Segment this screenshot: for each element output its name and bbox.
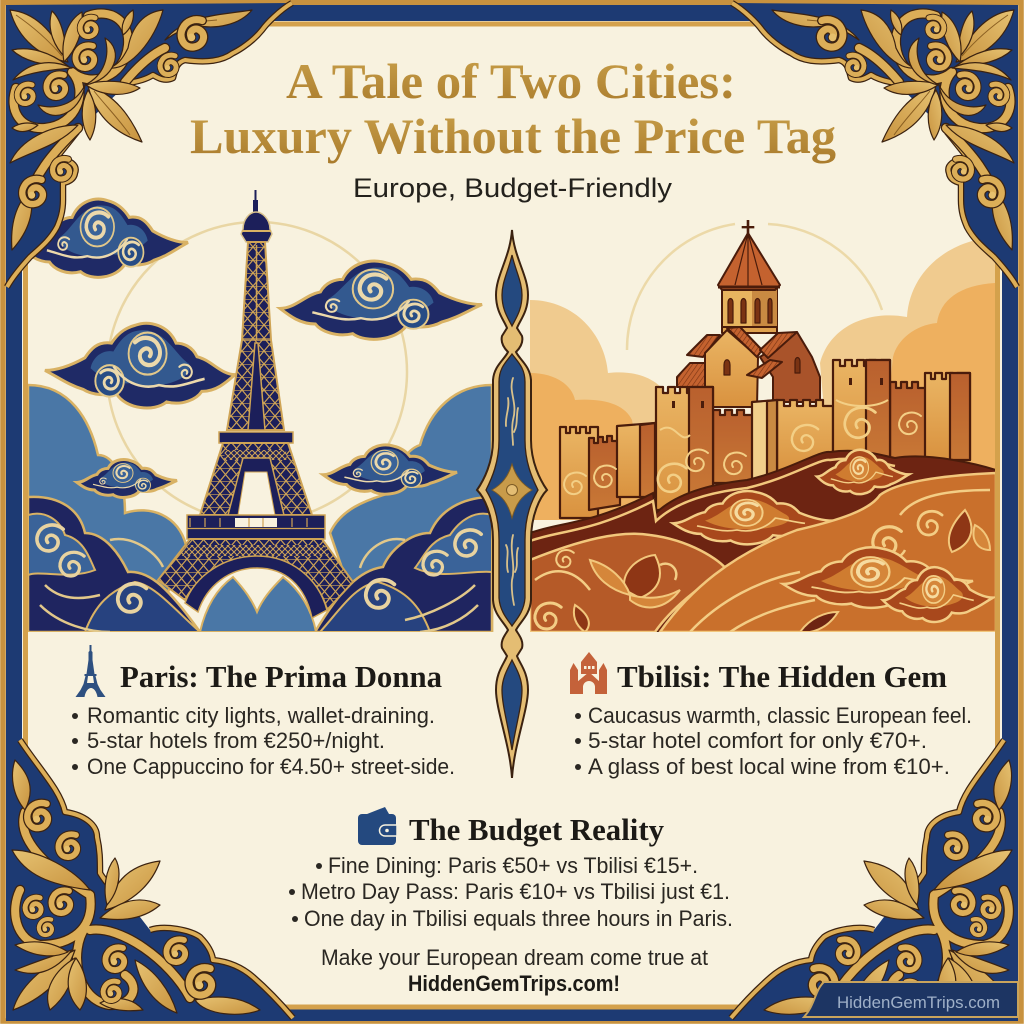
watermark panel — [804, 982, 1018, 1017]
heading: Tbilisi: Tbilisi: The Hidden Gem — [617, 659, 947, 694]
corner ornament: bottom right — [731, 740, 1018, 1018]
list: Tbilisi bullets: 5-star hotel comfort for only €70+. — [588, 728, 927, 753]
illustration: fortress walls and towers — [560, 360, 970, 518]
subtitle: Europe, Budget-Friendly — [353, 173, 673, 203]
illustration: church — [677, 220, 820, 407]
floating cloud: middle left — [45, 323, 235, 408]
floating cloud: small right — [323, 445, 457, 494]
list: Tbilisi bullets — [575, 703, 972, 779]
list: budget bullets: One day in Tbilisi equals three hours in Paris. — [304, 906, 733, 931]
watermark panel: HiddenGemTrips.com — [837, 993, 1000, 1012]
illustration: hill ornament strokes — [535, 490, 990, 632]
sun halo — [107, 222, 407, 522]
list: Paris bullets: 5-star hotels from €250+/night. — [87, 728, 385, 753]
list: Tbilisi bullets: Caucasus warmth, classic European feel. — [588, 703, 972, 728]
heading: budget: The Budget Reality — [409, 812, 664, 847]
illustration: big orange hill — [660, 473, 996, 632]
illustration: hill swirl cloud right — [883, 567, 993, 622]
illustration: left red hill — [530, 534, 727, 632]
illustration: Eiffel Tower — [158, 183, 353, 632]
heading: Paris: Paris: The Prima Donna — [120, 659, 442, 694]
title: A Tale of Two Cities: — [286, 53, 736, 109]
panel: budget reality — [289, 807, 733, 931]
list: Paris bullets: One Cappuccino for €4.50+ street-side. — [87, 754, 455, 779]
title: Luxury Without the Price Tag — [190, 108, 836, 164]
floating cloud: small left — [77, 459, 177, 497]
title — [190, 53, 836, 164]
list: budget bullets: Metro Day Pass: Paris €10+ vs Tbilisi just €1. — [301, 879, 730, 904]
blue background clouds — [28, 385, 492, 632]
list: Paris bullets: Romantic city lights, wallet-draining. — [87, 703, 435, 728]
sun halo — [627, 224, 882, 350]
call to action — [321, 945, 708, 996]
light background clouds — [530, 237, 995, 520]
illustration: warm swirl cloud on ridge — [673, 491, 833, 544]
list: budget bullets: Fine Dining: Paris €50+ vs Tbilisi €15+. — [328, 853, 698, 878]
panel: Tbilisi facts — [570, 652, 972, 779]
panel: Paris illustration — [20, 183, 492, 632]
call to action: HiddenGemTrips.com! — [408, 971, 620, 996]
divider ornament — [477, 230, 547, 778]
illustration: hill swirl cloud left — [783, 547, 973, 608]
corner ornament: top left — [6, 3, 292, 287]
list: Tbilisi bullets: A glass of best local wine from €10+. — [588, 754, 950, 779]
list: Paris bullets — [72, 703, 455, 779]
icon: Eiffel Tower — [76, 645, 106, 697]
floating cloud: top right — [280, 261, 482, 339]
panel: Tbilisi illustration — [530, 220, 996, 632]
call to action: Make your European dream come true at — [321, 945, 708, 970]
floating cloud: top left — [20, 199, 188, 277]
corner ornament: bottom left — [6, 740, 293, 1018]
illustration: flower motif — [574, 510, 990, 632]
dark navy foreground clouds — [28, 497, 492, 632]
panel: Paris facts — [72, 645, 455, 779]
warm background clouds — [530, 283, 995, 520]
corner ornament: top right — [732, 3, 1018, 287]
illustration: back hill outline and ornament — [530, 459, 895, 541]
illustration: dark back hill — [530, 451, 996, 632]
icon: wallet — [358, 807, 397, 845]
icon: castle — [570, 652, 607, 694]
list: budget bullets — [289, 853, 733, 931]
illustration: upper ridge cloud — [817, 450, 909, 494]
